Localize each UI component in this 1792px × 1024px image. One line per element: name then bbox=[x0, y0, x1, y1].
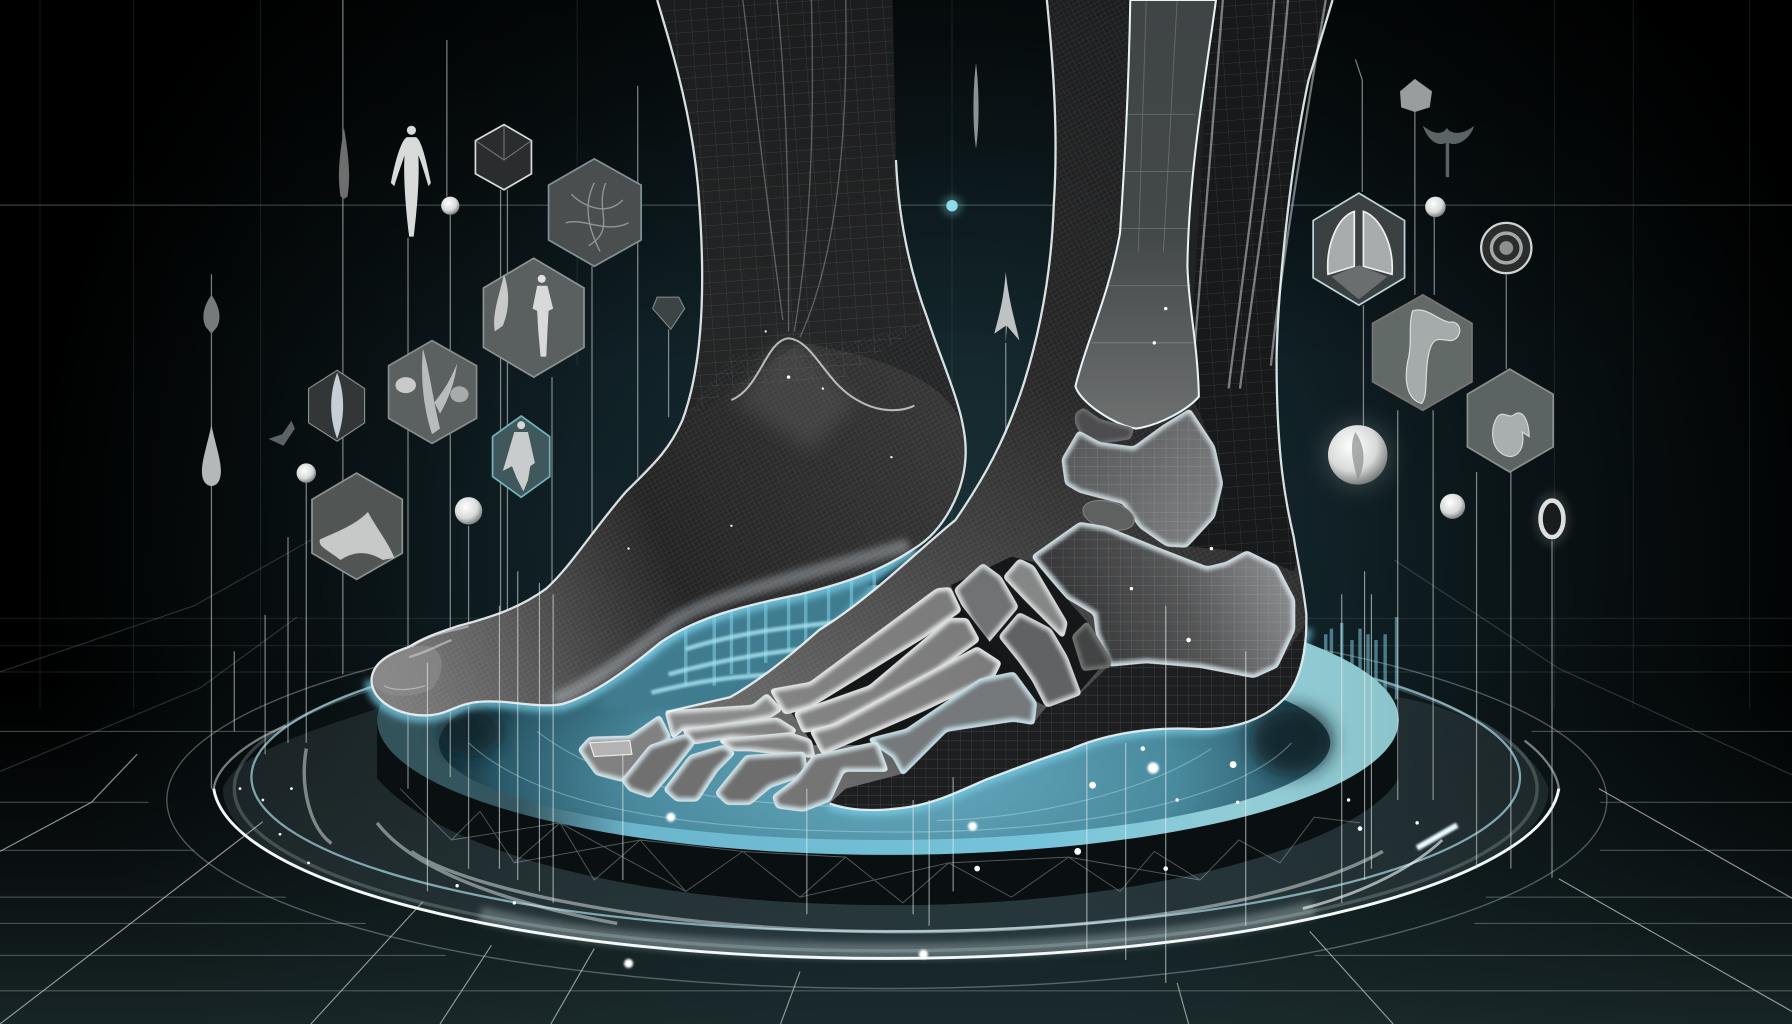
icon: droplet marker bbox=[202, 425, 221, 486]
right foot with skeleton bbox=[579, 0, 1333, 810]
outer holographic rings bbox=[167, 611, 1607, 989]
big toe of left foot bbox=[371, 646, 442, 696]
hexagon: lens bbox=[309, 370, 365, 441]
icon: leaf marker bbox=[203, 295, 219, 334]
faint outer ring bbox=[167, 611, 1607, 989]
teal axis node bbox=[942, 195, 962, 216]
crystal icon bbox=[653, 297, 685, 329]
toe bones bbox=[579, 695, 887, 810]
bright white ring bbox=[214, 789, 1559, 958]
hexagon: torso teal bbox=[493, 416, 550, 497]
left foot outline bbox=[371, 0, 966, 715]
icon: small polyhedron bbox=[1400, 79, 1432, 112]
left leg mesh bbox=[657, 0, 928, 421]
sole shadow bbox=[830, 623, 1306, 810]
right leg shape bbox=[666, 0, 1333, 810]
teal zone between the feet bbox=[594, 546, 914, 709]
glass ring band bbox=[223, 697, 1549, 960]
cuneiform bones bbox=[955, 560, 1110, 706]
left vertical stems behind icons bbox=[211, 0, 669, 869]
right vertical stems behind icons bbox=[1006, 59, 1552, 878]
front vertical data lines bbox=[427, 571, 1371, 983]
platform top rim bbox=[377, 585, 1399, 855]
tarsal dark gaps bbox=[951, 557, 1099, 706]
hexagon: hand and body bbox=[483, 258, 584, 377]
left leg tendon streaks bbox=[743, 0, 846, 337]
platform side wall bbox=[377, 714, 1399, 905]
floor perspective grid bbox=[0, 503, 1792, 1024]
left arch wispy glow bbox=[560, 546, 903, 697]
icon: caduceus bbox=[1423, 126, 1474, 177]
orb on axis right bbox=[1425, 197, 1446, 217]
platform inner surface bbox=[439, 646, 1333, 840]
toenail bbox=[590, 741, 632, 757]
inner pale arc bbox=[304, 749, 1383, 932]
left foot with mesh skin bbox=[371, 0, 966, 715]
hexagon: tooth bbox=[1467, 369, 1553, 472]
sparkles bbox=[239, 307, 1419, 968]
fibula strips bbox=[1193, 0, 1326, 389]
upper horizontal axis line bbox=[0, 0, 1792, 709]
hexagon: femur bone bbox=[1373, 295, 1472, 410]
navicular bone bbox=[1080, 495, 1138, 535]
large glass orb bbox=[1321, 418, 1394, 491]
orbs left bbox=[297, 197, 482, 525]
gap between metatarsals bbox=[789, 589, 1034, 745]
right foot outline bbox=[666, 0, 1333, 810]
icon: concentric disc bbox=[1481, 223, 1531, 273]
icon: human figure bbox=[391, 126, 431, 237]
tibia bone bbox=[1075, 0, 1216, 429]
hexagon: plant-like bones bbox=[389, 341, 477, 443]
icon: needle spike bbox=[973, 63, 979, 149]
talus bone bbox=[1063, 410, 1222, 546]
dark mesh behind ankle bbox=[1186, 0, 1333, 571]
right foot glow bbox=[830, 629, 1307, 810]
pale lower glow band bbox=[480, 909, 1314, 951]
blue ring bbox=[251, 623, 1520, 931]
icon: small pointer bbox=[269, 421, 295, 446]
hexagon: vein network bbox=[549, 159, 641, 266]
left foot glow bbox=[371, 549, 914, 715]
platform bbox=[377, 546, 1399, 905]
small orb right bbox=[1440, 494, 1465, 519]
hexagon: bone fragment bbox=[312, 473, 402, 579]
ring icon bbox=[1534, 491, 1570, 546]
left ankle bump bbox=[731, 338, 857, 451]
left leg shape bbox=[371, 0, 966, 715]
talus link bone bbox=[1075, 408, 1134, 443]
hexagon: lungs bbox=[1313, 193, 1405, 305]
metatarsal bones bbox=[771, 589, 1035, 774]
icon: spindle bbox=[339, 128, 349, 199]
icon: arrow head bbox=[994, 272, 1019, 343]
cyan data bars behind heel bbox=[1326, 617, 1397, 699]
hexagon: glass cube bbox=[475, 125, 531, 190]
calcaneus bone bbox=[1033, 523, 1294, 677]
